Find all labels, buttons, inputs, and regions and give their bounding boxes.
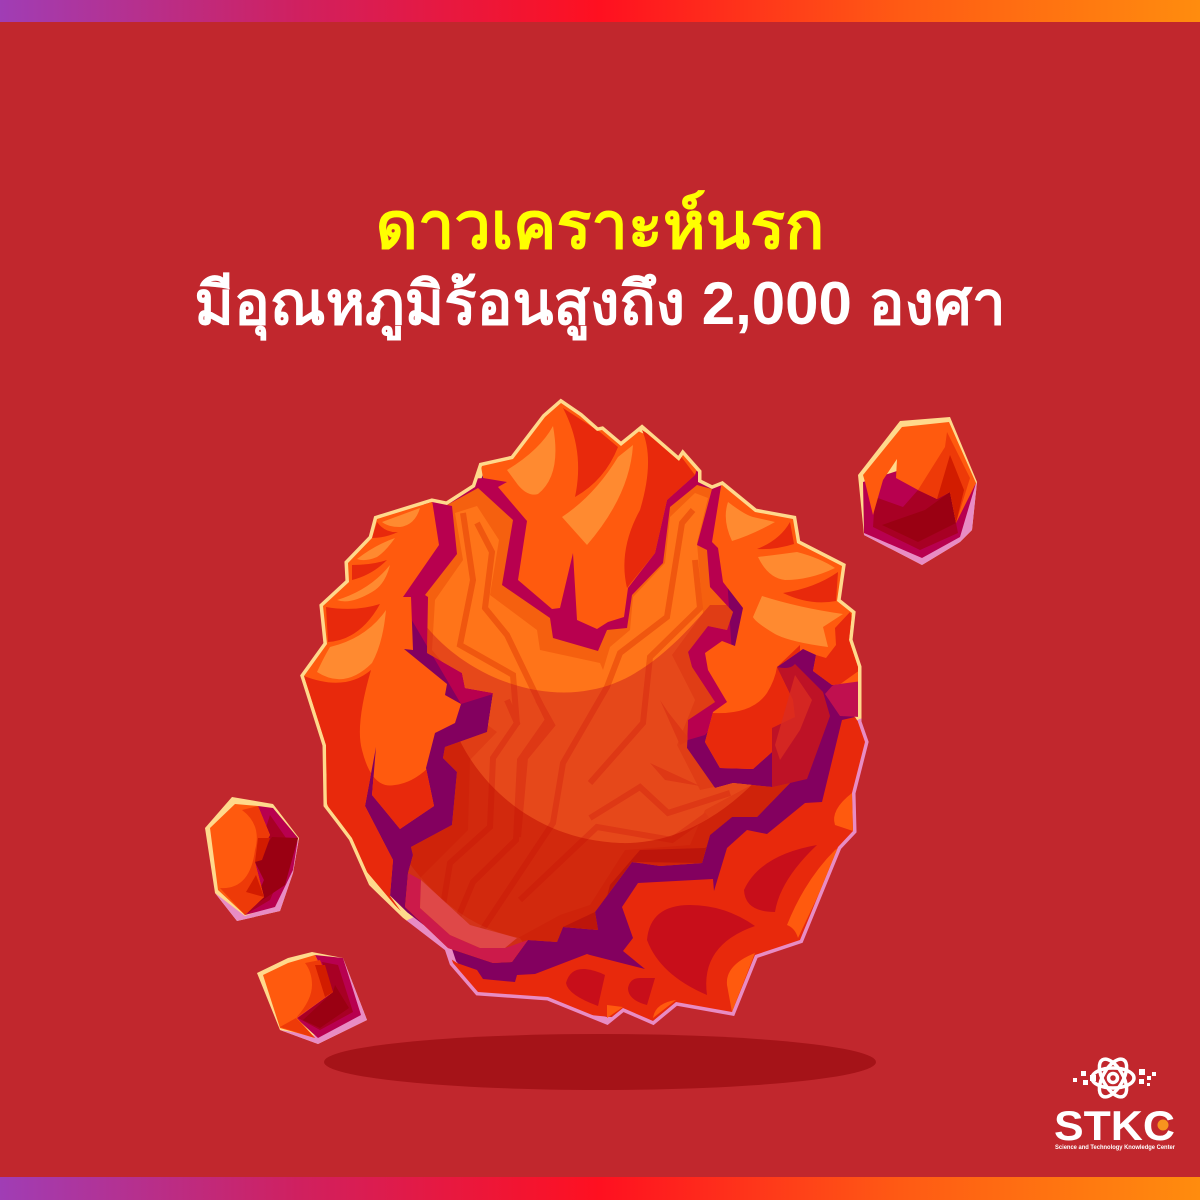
logo orange dot <box>1158 1120 1168 1130</box>
top plate <box>480 395 700 629</box>
planet silhouette outline <box>304 403 865 1021</box>
pale crescent <box>420 880 517 948</box>
logo tagline: Science and Technology Knowledge Center <box>1055 1145 1176 1151</box>
planet interior <box>290 395 900 1030</box>
magenta upper crack <box>400 470 735 740</box>
dark lower rim <box>564 847 706 930</box>
top gradient bar <box>0 0 1200 22</box>
lighter lower band <box>408 865 522 948</box>
bottom plate <box>440 717 870 1030</box>
central body <box>405 485 790 963</box>
bottom gradient bar <box>0 1177 1200 1200</box>
logo <box>1054 1055 1176 1151</box>
darker band below first arc <box>408 605 789 950</box>
title: ดาวเคราะห์นรก <box>376 189 824 262</box>
red lower area <box>304 670 434 911</box>
planet <box>290 395 900 1030</box>
right plate <box>705 485 858 769</box>
magenta fringe <box>405 873 528 963</box>
left plate <box>304 502 461 911</box>
crimson crack on right edge <box>825 682 858 717</box>
rock: bottom left <box>257 952 367 1044</box>
ground shadow <box>324 1034 876 1090</box>
rock: lower left <box>205 797 299 921</box>
translucent sphere over the right crack <box>772 664 830 787</box>
body stripes <box>456 508 731 840</box>
subtitle: มีอุณหภูมิร้อนสูงถึง 2,000 องศา <box>194 270 1006 341</box>
logo pixel squares <box>1073 1069 1156 1086</box>
logo icon: atom <box>1092 1055 1134 1101</box>
rock: top right <box>858 417 977 565</box>
darker band below second arc <box>405 742 790 963</box>
logo wordmark: STKC <box>1054 1102 1175 1149</box>
